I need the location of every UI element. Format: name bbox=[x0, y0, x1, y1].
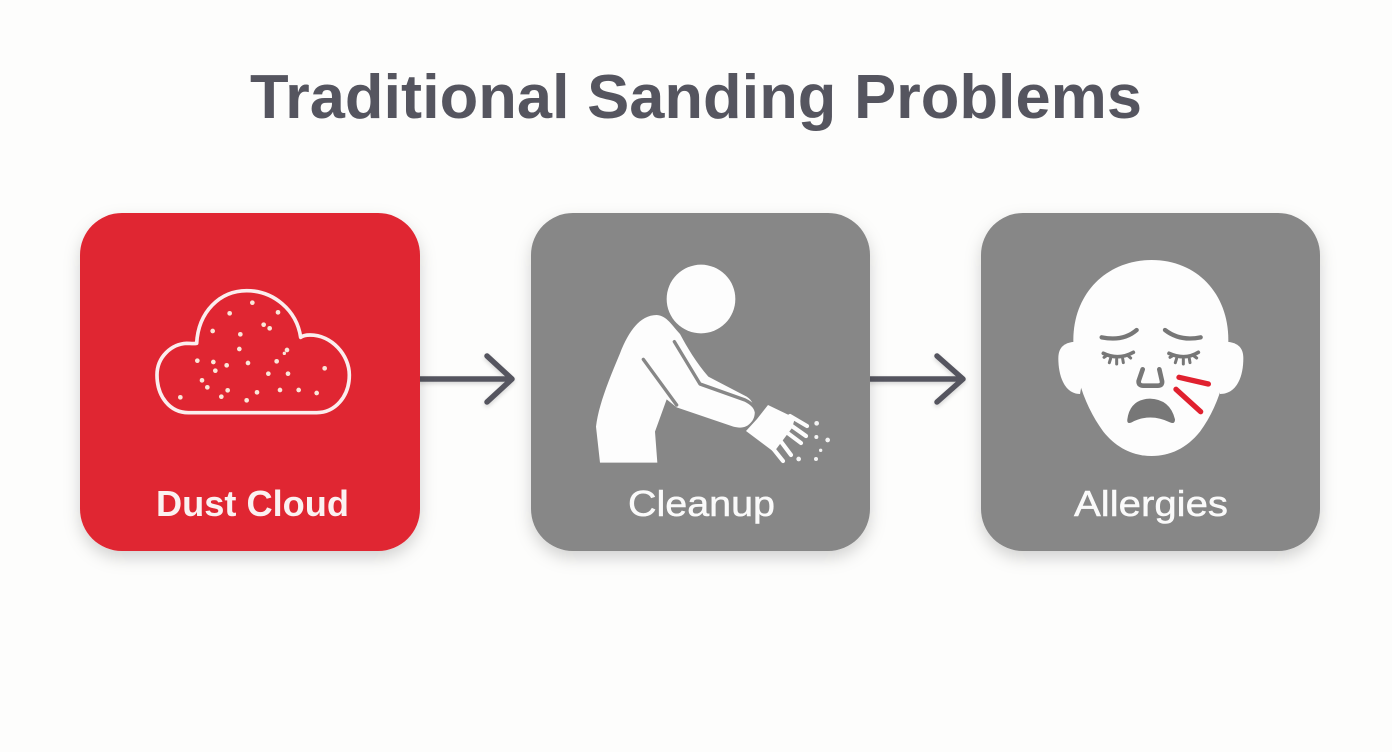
label: allergies: Allergies bbox=[1074, 483, 1228, 524]
panel: allergies bbox=[981, 213, 1320, 551]
arrow: cleanup to allergies bbox=[870, 356, 963, 402]
icon: bent person sweeping dust bbox=[596, 265, 830, 463]
icon: dust cloud bbox=[157, 291, 349, 413]
hand with brush fingers bbox=[746, 405, 807, 461]
arrow: dust cloud to cleanup bbox=[420, 356, 512, 402]
label: dust cloud: Dust Cloud bbox=[156, 483, 349, 524]
panel: cleanup bbox=[531, 213, 870, 551]
panel: dust cloud bbox=[80, 213, 420, 551]
label: cleanup: Cleanup bbox=[628, 483, 775, 524]
title: Traditional Sanding Problems bbox=[250, 63, 1142, 132]
icon: sick face bbox=[1058, 260, 1243, 456]
